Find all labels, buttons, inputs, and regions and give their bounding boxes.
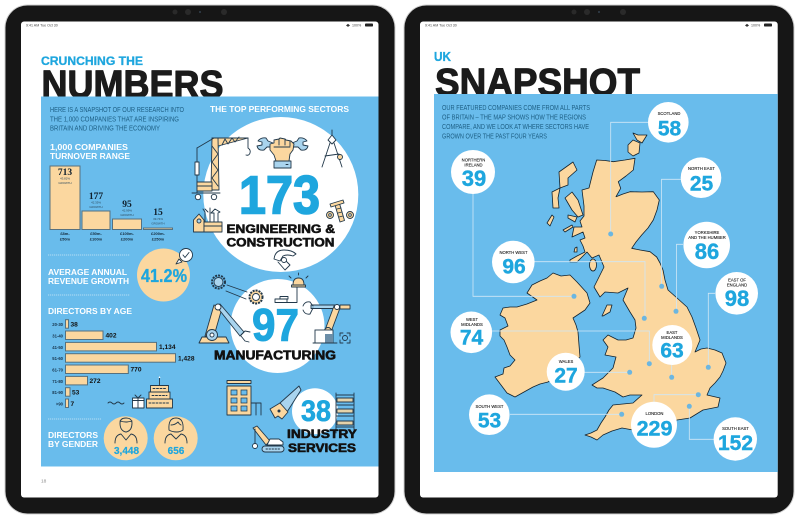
- right tablet: 9:41 AM Tue Oct 30: [425, 24, 457, 28]
- heading: turnover range: [50, 143, 131, 161]
- bar chart: turnover range: £50m-: [90, 231, 102, 236]
- bar chart: turnover range: 42.99%: [122, 208, 132, 212]
- map: uk and ireland: [495, 133, 726, 440]
- bar chart: directors by age: 1,428: [178, 356, 195, 362]
- right tablet: [404, 4, 794, 514]
- icon: ladder: [336, 393, 354, 433]
- region: northern ireland: IRELAND: [464, 162, 483, 168]
- intro text: OUR FEATURED COMPANIES COME FROM ALL PARTS: [442, 105, 590, 112]
- bar chart: turnover range: GROWTH: [89, 205, 103, 209]
- icon: drawing compass: [322, 130, 342, 167]
- text: 173: 173: [239, 166, 320, 226]
- region: west midlands: MIDLANDS: [461, 322, 483, 327]
- bar chart: turnover range: GROWTH: [120, 213, 134, 217]
- region: scotland: 58: [658, 118, 681, 140]
- bar chart: directors by age: >90: [56, 402, 64, 406]
- sector: engineering and construction: [192, 117, 358, 272]
- region: south east: 152: [718, 432, 753, 455]
- bar chart: directors by age: 20-30: [52, 322, 64, 327]
- sector: industry services: [227, 380, 357, 455]
- heading: turnover range: 1,000 COMPANIES: [50, 143, 129, 152]
- icon: gears: [212, 276, 262, 304]
- bar chart: directors by age: 31-40: [52, 334, 64, 338]
- region: london: 229: [637, 416, 672, 440]
- text: engineering and construction: ENGINEERING &: [226, 222, 335, 236]
- intro text: OF BRITAIN – THE MAP SHOWS HOW THE REGIONS: [442, 114, 586, 122]
- icon: hand saw: [270, 386, 301, 419]
- bar chart: directors by age: 53: [72, 390, 80, 396]
- icon: toolbox: [194, 208, 222, 232]
- icon: female director: [154, 416, 198, 460]
- bar chart: turnover range: £250m: [152, 236, 165, 242]
- region: wales: [547, 353, 585, 391]
- text: industry services: [287, 427, 357, 455]
- stat: average annual revenue growth: REVENUE GROWTH: [48, 277, 129, 286]
- map: ireland: [495, 273, 590, 397]
- region: northern ireland: 39: [462, 166, 486, 191]
- intro text: [50, 107, 184, 132]
- icon: hard hat tools: [274, 250, 296, 270]
- bar chart: turnover range: £100m-: [120, 231, 135, 236]
- region: east midlands: EAST: [667, 330, 678, 335]
- page number: 18: [41, 478, 47, 484]
- region: north west: 96: [502, 256, 526, 278]
- region: south east: SOUTH EAST: [722, 426, 749, 431]
- panel: crunching the numbers: [41, 96, 378, 466]
- bar chart: turnover range: 43.82%: [60, 176, 70, 180]
- bar chart: directors by age: 61-70: [52, 368, 64, 372]
- bar chart: directors by age: 272: [90, 378, 101, 385]
- bar chart: directors by age: 51-60: [52, 356, 64, 361]
- region: north west: NORTH WEST: [499, 250, 528, 255]
- region: west midlands: 74: [460, 326, 483, 350]
- region: east midlands: 63: [660, 340, 684, 362]
- intro text: [442, 105, 590, 140]
- icon: left robot arm: [199, 304, 250, 343]
- region: west midlands: [450, 312, 492, 353]
- intro text: COMPARE, AND WE LOOK AT WHERE SECTORS HAVE: [442, 124, 589, 131]
- icon: male director: 3,448: [114, 446, 139, 457]
- stat: directors by gender: DIRECTORS: [48, 431, 99, 440]
- bar chart: turnover range: £8m-: [60, 231, 70, 236]
- stat: average annual revenue growth: AVERAGE ANNUAL: [48, 268, 127, 277]
- bar chart: turnover range: GROWTH: [151, 222, 165, 226]
- stat: average annual revenue growth: 41.2%: [141, 266, 187, 286]
- panel: uk snapshot: [434, 94, 778, 472]
- bar chart: turnover range: 95: [122, 200, 132, 210]
- bar chart: turnover range: 15: [153, 208, 163, 218]
- region: yorkshire and the humber: AND THE HUMBER: [688, 235, 726, 240]
- region: yorkshire and the humber: YORKSHIRE: [695, 230, 720, 235]
- region: west midlands: WEST: [466, 317, 478, 322]
- kicker: crunching the: CRUNCHING THE: [41, 54, 143, 68]
- bar chart: directors by age: 1,134: [159, 344, 176, 351]
- region: london: [631, 402, 677, 448]
- right tablet: 100%: [751, 24, 761, 28]
- bar chart: turnover range: [50, 143, 172, 242]
- intro text: GROWN OVER THE PAST FOUR YEARS: [442, 134, 547, 140]
- bar chart: directors by age: DIRECTORS BY AGE: [48, 307, 133, 316]
- region: wales: WALES: [559, 359, 573, 364]
- bar chart: directors by age: 770: [130, 366, 142, 374]
- bar chart: turnover range: 39.74%: [153, 217, 163, 221]
- region: east of england: 98: [725, 286, 749, 311]
- text: 97: 97: [252, 300, 299, 350]
- title: numbers: NUMBERS: [42, 64, 224, 106]
- text: industry services: SERVICES: [288, 441, 356, 455]
- map: great britain: [570, 158, 726, 440]
- icon: crawler crane: [252, 426, 284, 452]
- bar chart: directors by age: 402: [106, 332, 117, 340]
- region: south west: [469, 394, 510, 435]
- bar chart: turnover range: 42.35%: [91, 200, 101, 204]
- region: east midlands: [652, 325, 692, 365]
- text: industry services: INDUSTRY: [287, 427, 357, 441]
- bar chart: turnover range: £100m: [90, 236, 103, 242]
- region: scotland: [648, 102, 689, 143]
- icon: female director: 656: [168, 446, 185, 457]
- region: yorkshire and the humber: [683, 222, 730, 268]
- text: engineering and construction: CONSTRUCTION: [226, 236, 334, 250]
- bar chart: directors by age: 38: [70, 322, 78, 328]
- bar chart: directors by age: 81-90: [52, 390, 64, 395]
- title: snapshot: SNAPSHOT: [435, 62, 640, 104]
- bar chart: turnover range: £50m: [60, 236, 71, 242]
- bar chart: turnover range: 177: [89, 192, 103, 202]
- connector lines: [473, 122, 715, 439]
- left tablet: 100%: [352, 24, 362, 28]
- map: scottish islands and isle of man: [547, 133, 647, 316]
- region: scotland: SCOTLAND: [658, 111, 680, 116]
- bar chart: turnover range: £200m: [121, 236, 134, 242]
- intro text: THE 1,000 COMPANIES THAT ARE INSPIRING: [50, 116, 179, 124]
- bar chart: directors by age: 41-50: [52, 345, 64, 350]
- icon: birthday cake and gift: [108, 376, 172, 408]
- icon: male director: [104, 416, 148, 460]
- icon: bolt and nuts: [326, 200, 354, 222]
- bar chart: directors by age: 71-80: [52, 379, 64, 384]
- region: south east: [714, 417, 757, 461]
- text: manufacturing: MANUFACTURING: [214, 349, 336, 363]
- intro text: HERE IS A SNAPSHOT OF OUR RESEARCH INTO: [50, 107, 184, 114]
- intro text: BRITAIN AND DRIVING THE ECONOMY: [50, 126, 160, 132]
- stat: average annual revenue growth: [48, 248, 192, 302]
- region: wales: 27: [554, 364, 578, 388]
- sector: manufacturing: [199, 273, 350, 373]
- region: northern ireland: NORTHERN: [462, 158, 485, 162]
- bar chart: turnover range: GROWTH: [58, 181, 72, 185]
- region: east of england: [715, 272, 758, 315]
- icon: fist with wrench: [257, 138, 308, 168]
- icon: right robot arm: [303, 302, 350, 343]
- region: northern ireland: [451, 150, 495, 194]
- region: north east: 25: [690, 172, 713, 196]
- bar chart: turnover range: 713: [58, 168, 72, 178]
- region: east of england: ENGLAND: [727, 282, 747, 288]
- region: london: LONDON: [646, 411, 663, 416]
- left tablet: 9:41 AM Tue Oct 30: [26, 24, 58, 28]
- region: east midlands: MIDLANDS: [661, 335, 683, 340]
- icon: alarm and press: [275, 273, 308, 302]
- text: engineering and construction: [226, 222, 335, 250]
- icon: tower crane: [192, 137, 250, 200]
- bar chart: directors by age: [48, 307, 195, 408]
- stat: directors by gender: BY GENDER: [48, 440, 98, 449]
- stat: directors by gender: [48, 416, 198, 460]
- region: north west: [492, 241, 535, 283]
- left tablet: [4, 4, 396, 514]
- icon: office building: [227, 380, 261, 415]
- heading: turnover range: TURNOVER RANGE: [50, 152, 131, 161]
- region: yorkshire and the humber: 86: [695, 239, 719, 264]
- heading: top performing sectors: THE TOP PERFORMING SECTORS: [210, 105, 350, 114]
- text: 38: 38: [301, 395, 331, 428]
- region: south west: 53: [478, 410, 501, 432]
- bar chart: turnover range: £200m-: [151, 231, 166, 236]
- region: east of england: EAST OF: [728, 278, 746, 282]
- region: north east: NORTH EAST: [688, 166, 715, 171]
- bar chart: directors by age: 7: [70, 401, 74, 408]
- kicker: uk: UK: [434, 50, 451, 64]
- region: north east: [681, 157, 721, 198]
- location dots: [572, 232, 711, 417]
- region: south west: SOUTH WEST: [476, 404, 504, 409]
